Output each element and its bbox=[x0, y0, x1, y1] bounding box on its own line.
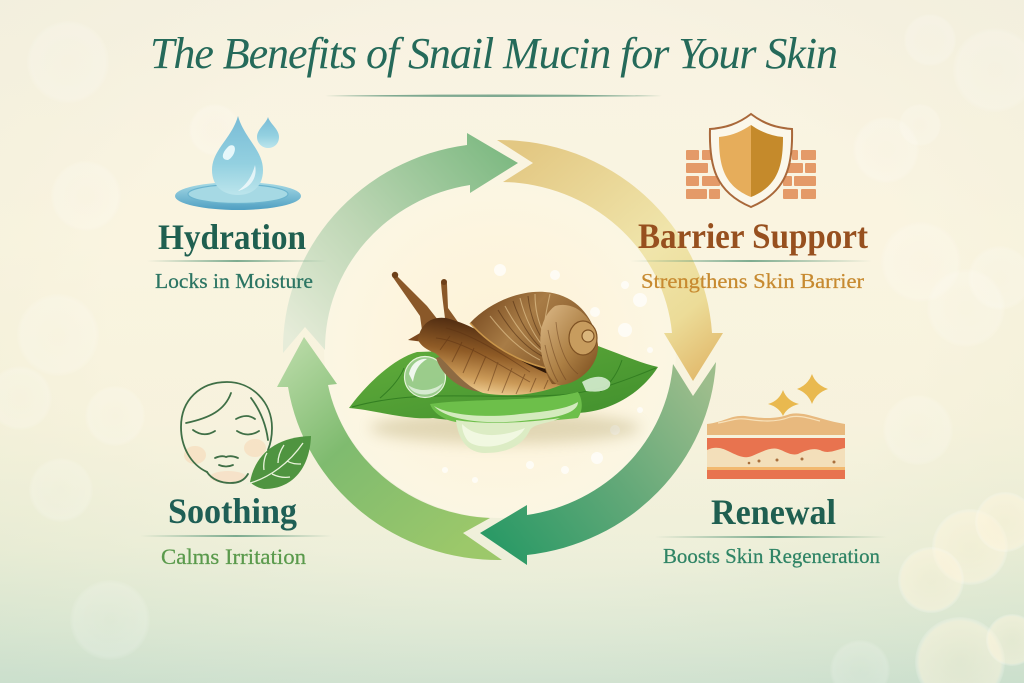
heading: Barrier Support bbox=[638, 216, 868, 256]
caption: Boosts Skin Regeneration bbox=[663, 544, 880, 568]
snail body bbox=[418, 318, 561, 395]
mucus drip highlight bbox=[462, 424, 525, 447]
icon: water drops bbox=[175, 116, 301, 210]
arrow: barrier to renewal bbox=[497, 140, 723, 381]
panel: barrier support bbox=[630, 114, 872, 293]
body texture bbox=[436, 328, 548, 394]
heading: Soothing bbox=[168, 491, 297, 531]
heading: Renewal bbox=[711, 492, 836, 532]
panel: renewal bbox=[655, 374, 887, 568]
tentacles bbox=[392, 272, 458, 342]
mucus pool on leaf bbox=[430, 392, 582, 424]
cycle centre disk bbox=[324, 180, 676, 518]
icon: shield and bricks bbox=[686, 114, 816, 207]
icon: calm face with leaf bbox=[181, 382, 311, 489]
panel: soothing bbox=[140, 382, 332, 569]
heading: Hydration bbox=[158, 217, 306, 257]
divider bbox=[140, 535, 332, 537]
divider bbox=[147, 260, 327, 262]
mucus trail right bbox=[582, 377, 610, 392]
mucus pool highlight bbox=[434, 402, 578, 422]
centre sparkles bbox=[442, 264, 653, 483]
shell outer whorl bbox=[540, 305, 598, 385]
caption: Strengthens Skin Barrier bbox=[641, 269, 864, 293]
panel: hydration bbox=[147, 116, 327, 293]
illustration: snail on leaf bbox=[349, 272, 658, 453]
cycle arrows bbox=[277, 133, 723, 565]
snail lower shell bbox=[436, 350, 500, 392]
shell inner whorl bbox=[569, 321, 597, 355]
caption: Locks in Moisture bbox=[155, 269, 313, 293]
title: The Benefits of Snail Mucin for Your Skin bbox=[150, 29, 838, 78]
arrow: soothing to hydration bbox=[277, 337, 502, 560]
caption: Calms Irritation bbox=[161, 544, 306, 569]
arrow: renewal to soothing bbox=[480, 362, 716, 565]
water droplet bbox=[404, 356, 446, 398]
leaf bbox=[349, 346, 658, 421]
whorl ridges bbox=[545, 322, 578, 382]
shell ridges bbox=[490, 294, 550, 360]
divider bbox=[655, 536, 887, 538]
snail shell bbox=[470, 292, 597, 384]
divider bbox=[630, 260, 872, 262]
leaf shadow bbox=[370, 412, 640, 444]
shell dark opening bbox=[470, 323, 548, 374]
icon: skin layers with sparkles bbox=[707, 374, 845, 479]
shell core bbox=[582, 330, 594, 342]
title underline bbox=[325, 94, 662, 97]
shell rim bbox=[470, 323, 545, 368]
mucus drip bbox=[456, 418, 560, 453]
arrow: hydration to barrier bbox=[283, 133, 518, 353]
leaf veins bbox=[352, 360, 656, 407]
